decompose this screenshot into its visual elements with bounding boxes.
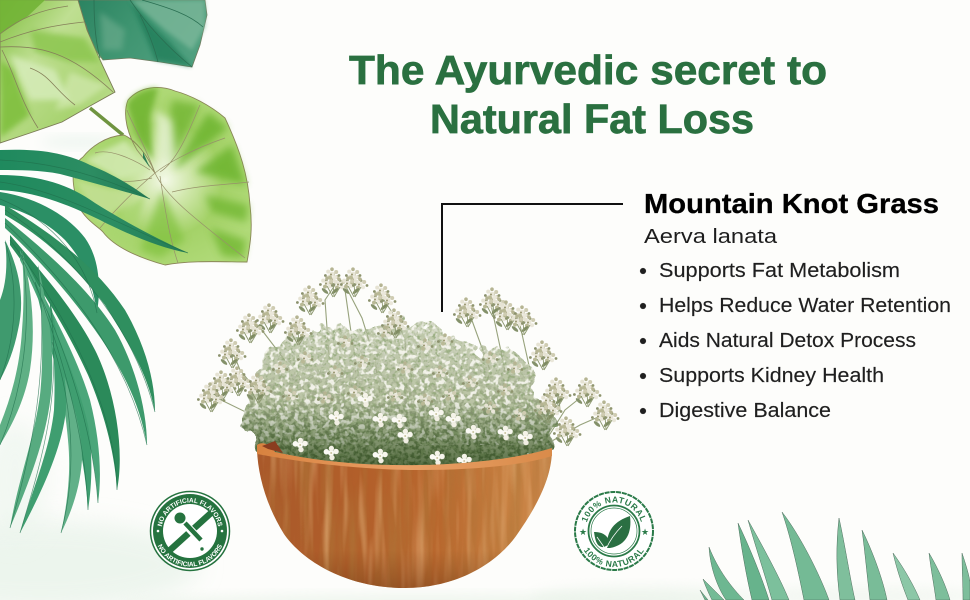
badge: 100% natural	[574, 491, 654, 571]
badge: 100% natural: 100% NATURAL	[584, 548, 644, 568]
leaf: dark teal top leaf	[73, 0, 207, 67]
badge: 100% natural: ★	[579, 527, 587, 537]
benefits list: Supports Kidney Health	[659, 365, 884, 387]
leaf: round green leaf	[73, 88, 251, 265]
badge: no artificial flavors: NO ARTIFICIAL FLAVORS	[157, 498, 222, 526]
title: Natural Fat Loss	[430, 96, 754, 142]
benefits list: Helps Reduce Water Retention	[659, 295, 951, 317]
badge: no artificial flavors: NO ARTIFICIAL FLAVORS	[158, 544, 222, 566]
benefits list: Digestive Balance	[659, 400, 831, 422]
title	[349, 47, 827, 142]
leaf stem	[90, 108, 123, 135]
heading: Mountain Knot Grass: Mountain Knot Grass	[644, 188, 939, 219]
plant: mountain knot grass	[197, 267, 619, 475]
leaf: large light green top-left leaf	[0, 0, 115, 143]
benefits list	[640, 260, 951, 422]
benefits list: Supports Fat Metabolism	[659, 260, 900, 282]
outer flower clusters	[197, 267, 619, 446]
badge: 100% natural: 100% NATURAL	[582, 496, 646, 522]
wooden bowl	[250, 441, 560, 595]
palm frond: bottom right	[700, 512, 970, 600]
botanical name: Aerva lanata	[644, 226, 778, 248]
benefits list: Aids Natural Detox Process	[659, 330, 916, 352]
callout line	[442, 204, 623, 312]
badge: 100% natural: ★	[641, 527, 649, 537]
title: The Ayurvedic secret to	[349, 47, 827, 93]
badge: no artificial flavors	[150, 490, 230, 572]
inner flower clusters	[272, 325, 533, 468]
palm frond: left	[0, 150, 188, 533]
